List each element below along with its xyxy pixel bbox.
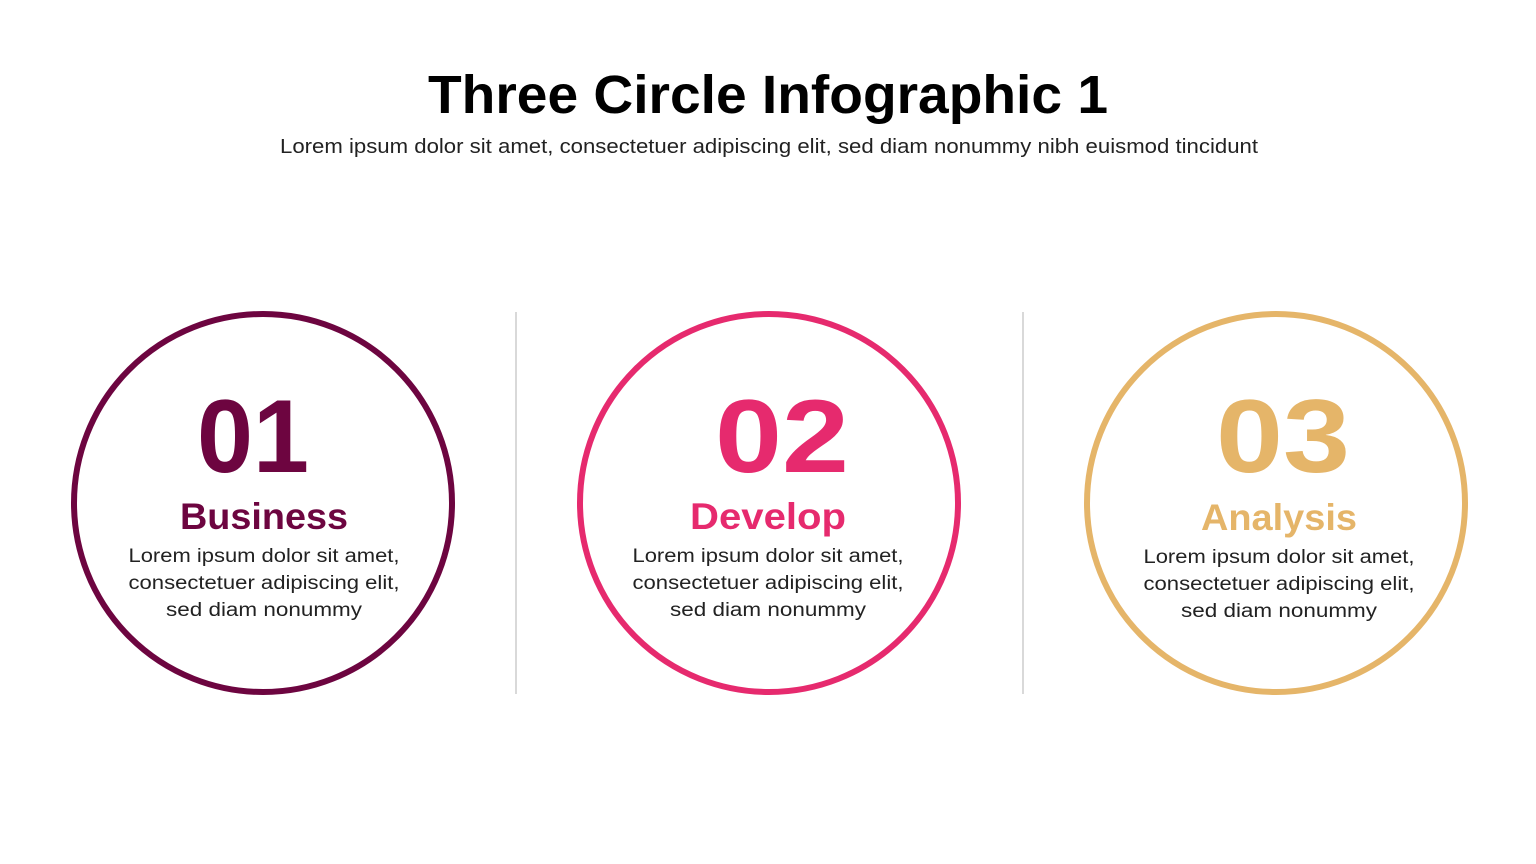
panel: business xyxy=(74,314,452,692)
panel: analysis xyxy=(1087,314,1465,692)
title: Three Circle Infographic 1 xyxy=(428,65,1108,125)
panel: analysis: 03 xyxy=(1216,379,1350,495)
panel: develop: Develop xyxy=(690,496,846,537)
panel: develop: sed diam nonummy xyxy=(670,600,867,621)
panel: analysis: Analysis xyxy=(1201,497,1357,538)
panel: analysis: Lorem ipsum dolor sit amet, xyxy=(1144,547,1414,568)
panel: develop xyxy=(580,314,958,692)
panel: analysis: sed diam nonummy xyxy=(1181,601,1378,622)
panel: develop: Lorem ipsum dolor sit amet, xyxy=(632,546,904,567)
subtitle: Lorem ipsum dolor sit amet, consectetuer adipiscing elit, sed diam nonummy nibh euismod tincidunt xyxy=(280,136,1258,158)
panel: analysis: consectetuer adipiscing elit, xyxy=(1144,574,1414,595)
panel: business: Business xyxy=(180,496,348,537)
panel: business: consectetuer adipiscing elit, xyxy=(128,573,400,594)
panel: develop: 02 xyxy=(715,379,849,495)
panel: develop: consectetuer adipiscing elit, xyxy=(632,573,904,594)
panel: business: sed diam nonummy xyxy=(166,600,363,621)
panel: business: 01 xyxy=(197,379,309,495)
panel: business: Lorem ipsum dolor sit amet, xyxy=(128,546,400,567)
